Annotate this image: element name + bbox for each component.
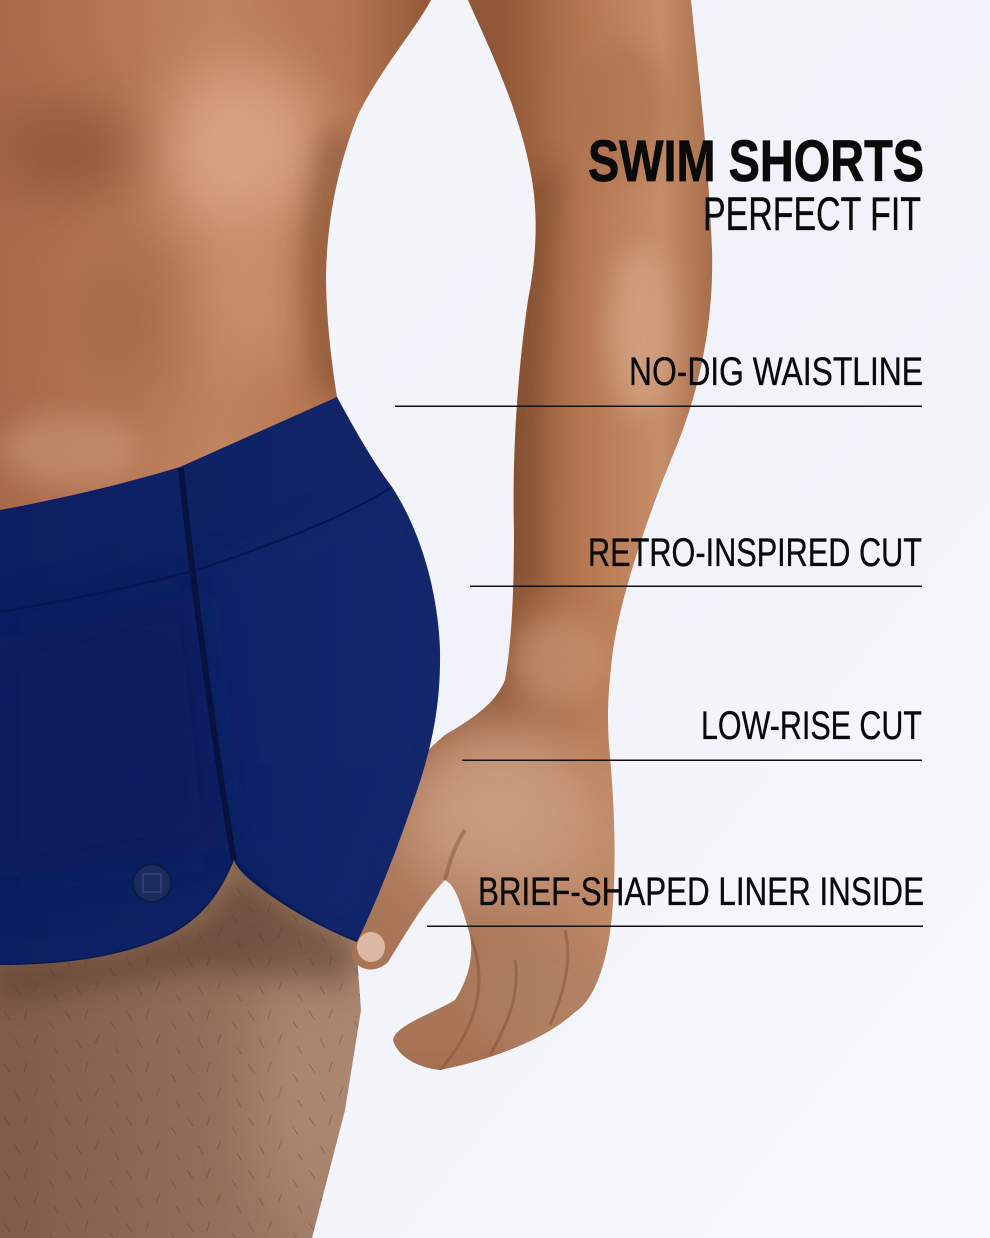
photo: torso xyxy=(0,0,440,540)
photo: thigh xyxy=(0,850,370,1238)
callout: low-rise cut: LOW-RISE CUT xyxy=(701,704,922,748)
photo: forearm and hand xyxy=(352,0,712,1070)
logo badge on shorts xyxy=(133,864,171,902)
title xyxy=(588,129,924,240)
thumb nail xyxy=(357,932,385,962)
callout: no-dig waistline: NO-DIG WAISTLINE xyxy=(629,350,923,394)
photo: navy swim shorts xyxy=(0,390,445,970)
hand creases xyxy=(440,830,568,1070)
